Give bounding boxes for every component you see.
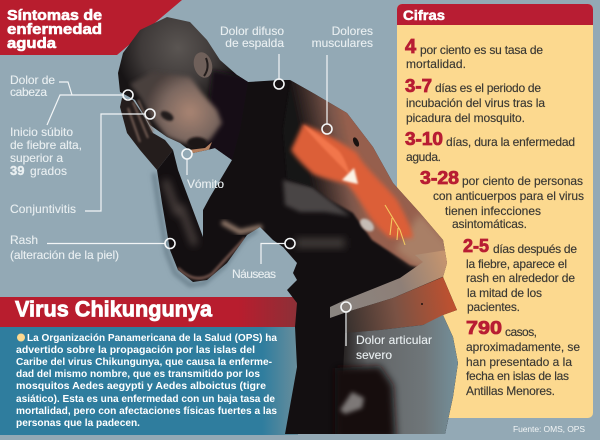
- jeans shadow: [335, 366, 396, 440]
- neck: [206, 68, 248, 160]
- label: vomito: Vómito: [187, 177, 224, 191]
- cifras: 2-5 dias: rash en alrededor de: [466, 271, 575, 285]
- label: dolor de cabeza: [10, 73, 72, 99]
- label: dolor de cabeza: cabeza: [10, 85, 47, 99]
- panel: description: Caribe del virus Chikungunya, que causa la enferme-: [16, 356, 272, 368]
- shirt dot: [421, 303, 423, 305]
- cifras: 3-7 dias: días es el periodo de: [435, 81, 541, 95]
- muscle highlight: [303, 125, 350, 175]
- panel: cifras: [397, 4, 593, 418]
- cifras: 4 por ciento: 4: [405, 36, 417, 58]
- label: dolores musculares: Dolores: [332, 24, 373, 38]
- label: nauseas: Náuseas: [232, 267, 276, 281]
- cifras: 2-5 dias: pacientes.: [467, 300, 520, 314]
- figure: man with hand on head: [110, 10, 470, 440]
- cifras: 3-28 por ciento: asintomáticas.: [452, 217, 527, 231]
- cifras heading: Cifras: [403, 7, 445, 23]
- cifras: 790 casos: casos,: [505, 325, 537, 339]
- title background: [0, 0, 182, 55]
- cifras: 2-5 dias: la mitad de los: [467, 286, 542, 300]
- elbow highlight: [178, 238, 245, 278]
- cifras: 790 casos: fecha en islas de las: [466, 369, 569, 383]
- armpit mark: [352, 137, 360, 147]
- label: conjuntivitis: Conjuntivitis: [10, 202, 76, 216]
- cifras: 790 casos: han presentado a la: [466, 355, 572, 369]
- cifras: 3-10 dias: [405, 129, 575, 164]
- cifras: 790 casos: aproximadamente, se: [466, 340, 580, 354]
- label: fiebre: [10, 90, 133, 178]
- elbow tendon white: [358, 217, 376, 233]
- label: vomito: [182, 149, 224, 191]
- bullet: [17, 334, 25, 342]
- chin: [190, 142, 212, 153]
- forearm across waist: [330, 250, 447, 318]
- cifras: 3-7 dias: 3-7: [405, 76, 432, 96]
- ear: [194, 52, 212, 78]
- cifras: 2-5 dias: 2-5: [463, 236, 489, 256]
- panel: description: [0, 327, 298, 435]
- muscles: [291, 124, 413, 238]
- cifras: 3-28 por ciento: tienen infecciones: [445, 204, 541, 218]
- body: [150, 70, 470, 440]
- source: Fuente: OMS, OPS: [513, 424, 585, 434]
- hip grey shading: [296, 238, 345, 248]
- label: rash: (alteración de la piel): [10, 248, 119, 262]
- panel: description: La Organización Panamericana de la Salud (OPS) ha: [27, 332, 277, 344]
- torso base: [150, 70, 470, 440]
- inner ear: [204, 58, 208, 76]
- cifras: 790 casos: Antillas Menores.: [466, 384, 555, 398]
- cifras: 4 por ciento: [405, 36, 543, 71]
- panel: description: asiático). Esta es una enfermedad con un baja tasa de: [16, 393, 275, 405]
- forearm streaks: [165, 180, 195, 245]
- nerve: [385, 205, 405, 245]
- lower arm tan: [394, 214, 445, 270]
- mouth shadow: [187, 137, 207, 149]
- cifras: 4 por ciento: mortalidad.: [406, 57, 466, 71]
- hand at pocket: [340, 392, 364, 414]
- banner: virus chikungunya: Virus Chikungunya: [15, 296, 213, 322]
- label: dolor articular: Dolor articular: [356, 333, 432, 347]
- cifras: 790 casos: [466, 318, 580, 398]
- label: dolores musculares: musculares: [312, 36, 373, 50]
- title: sintomas: Síntomas de: [7, 7, 102, 24]
- panel: description: mortalidad, pero con afectaciones físicas fuertes a las: [16, 405, 277, 417]
- arm skin: [290, 80, 447, 272]
- title: sintomas: enfermedad: [7, 21, 102, 38]
- cifras: 3-10 dias: 3-10: [405, 129, 443, 149]
- torso grey shading: [283, 180, 350, 216]
- label: dolor de espalda: [220, 24, 284, 89]
- cifras: 2-5 dias: días después de: [493, 242, 577, 256]
- label: fiebre: superior a: [10, 151, 63, 165]
- title: sintomas: aguda: [7, 35, 57, 52]
- fingers: [128, 100, 153, 142]
- panel: description: personas que la padecen.: [16, 417, 140, 429]
- label: fiebre: de fiebre alta,: [10, 138, 82, 152]
- cifras: 3-10 dias: aguda.: [406, 150, 441, 164]
- eye shadow: [159, 109, 175, 123]
- cifras: 3-28 por ciento: [420, 168, 584, 231]
- cifras: 3-10 dias: días, dura la enfermedad: [446, 135, 575, 149]
- cifras: 3-28 por ciento: por ciento de personas: [462, 174, 583, 188]
- label: rash: [10, 233, 175, 262]
- cifras: 2-5 dias: la fiebre, aparece el: [466, 257, 567, 271]
- cifras: 4 por ciento: por ciento es su tasa de: [420, 43, 543, 57]
- cifras: 3-28 por ciento: con anticuerpos para el virus: [433, 189, 584, 203]
- label: dolor de espalda: Dolor difuso: [220, 24, 284, 38]
- arm drop shadow: [154, 173, 257, 285]
- panel: description: mosquitos Aedes aegypti y Aedes alboictus (tigre: [16, 380, 266, 392]
- cifras: 2-5 dias: [463, 236, 577, 314]
- tendon: [342, 168, 358, 184]
- face: [130, 72, 222, 145]
- cifras: 3-7 dias: picadura del mosquito.: [406, 111, 525, 125]
- label: dolor articular: [341, 302, 432, 362]
- hand: [120, 98, 173, 170]
- label: rash: Rash: [10, 233, 38, 247]
- panel: description: dad del mismo nombre, que es transmitido por los: [16, 368, 260, 380]
- jeans: [340, 315, 458, 434]
- label: dolor articular: severo: [356, 348, 392, 362]
- cifras: 3-28 por ciento: 3-28: [420, 168, 459, 188]
- label: dolor de espalda: de espalda: [225, 36, 284, 50]
- shirt hem: [347, 277, 457, 333]
- label: fiebre: grados: [30, 164, 67, 178]
- hair: [118, 17, 248, 160]
- head: [118, 17, 248, 160]
- cifras: 3-7 dias: [405, 76, 545, 125]
- label: fiebre: 39: [10, 163, 24, 178]
- panel: description: advertido sobre la propagación por las islas del: [16, 344, 255, 356]
- label: dolores musculares: [312, 24, 373, 134]
- label: nauseas: [232, 238, 295, 281]
- label: dolor de cabeza: Dolor de: [10, 73, 55, 87]
- cifras: 3-7 dias: incubación del virus tras la: [406, 96, 545, 110]
- label: conjuntivitis: [10, 109, 155, 216]
- label: fiebre: Inicio súbito: [10, 125, 73, 139]
- banner: virus chikungunya: [0, 296, 298, 327]
- cifras: 790 casos: 790: [466, 318, 502, 338]
- chest highlight: [222, 222, 262, 232]
